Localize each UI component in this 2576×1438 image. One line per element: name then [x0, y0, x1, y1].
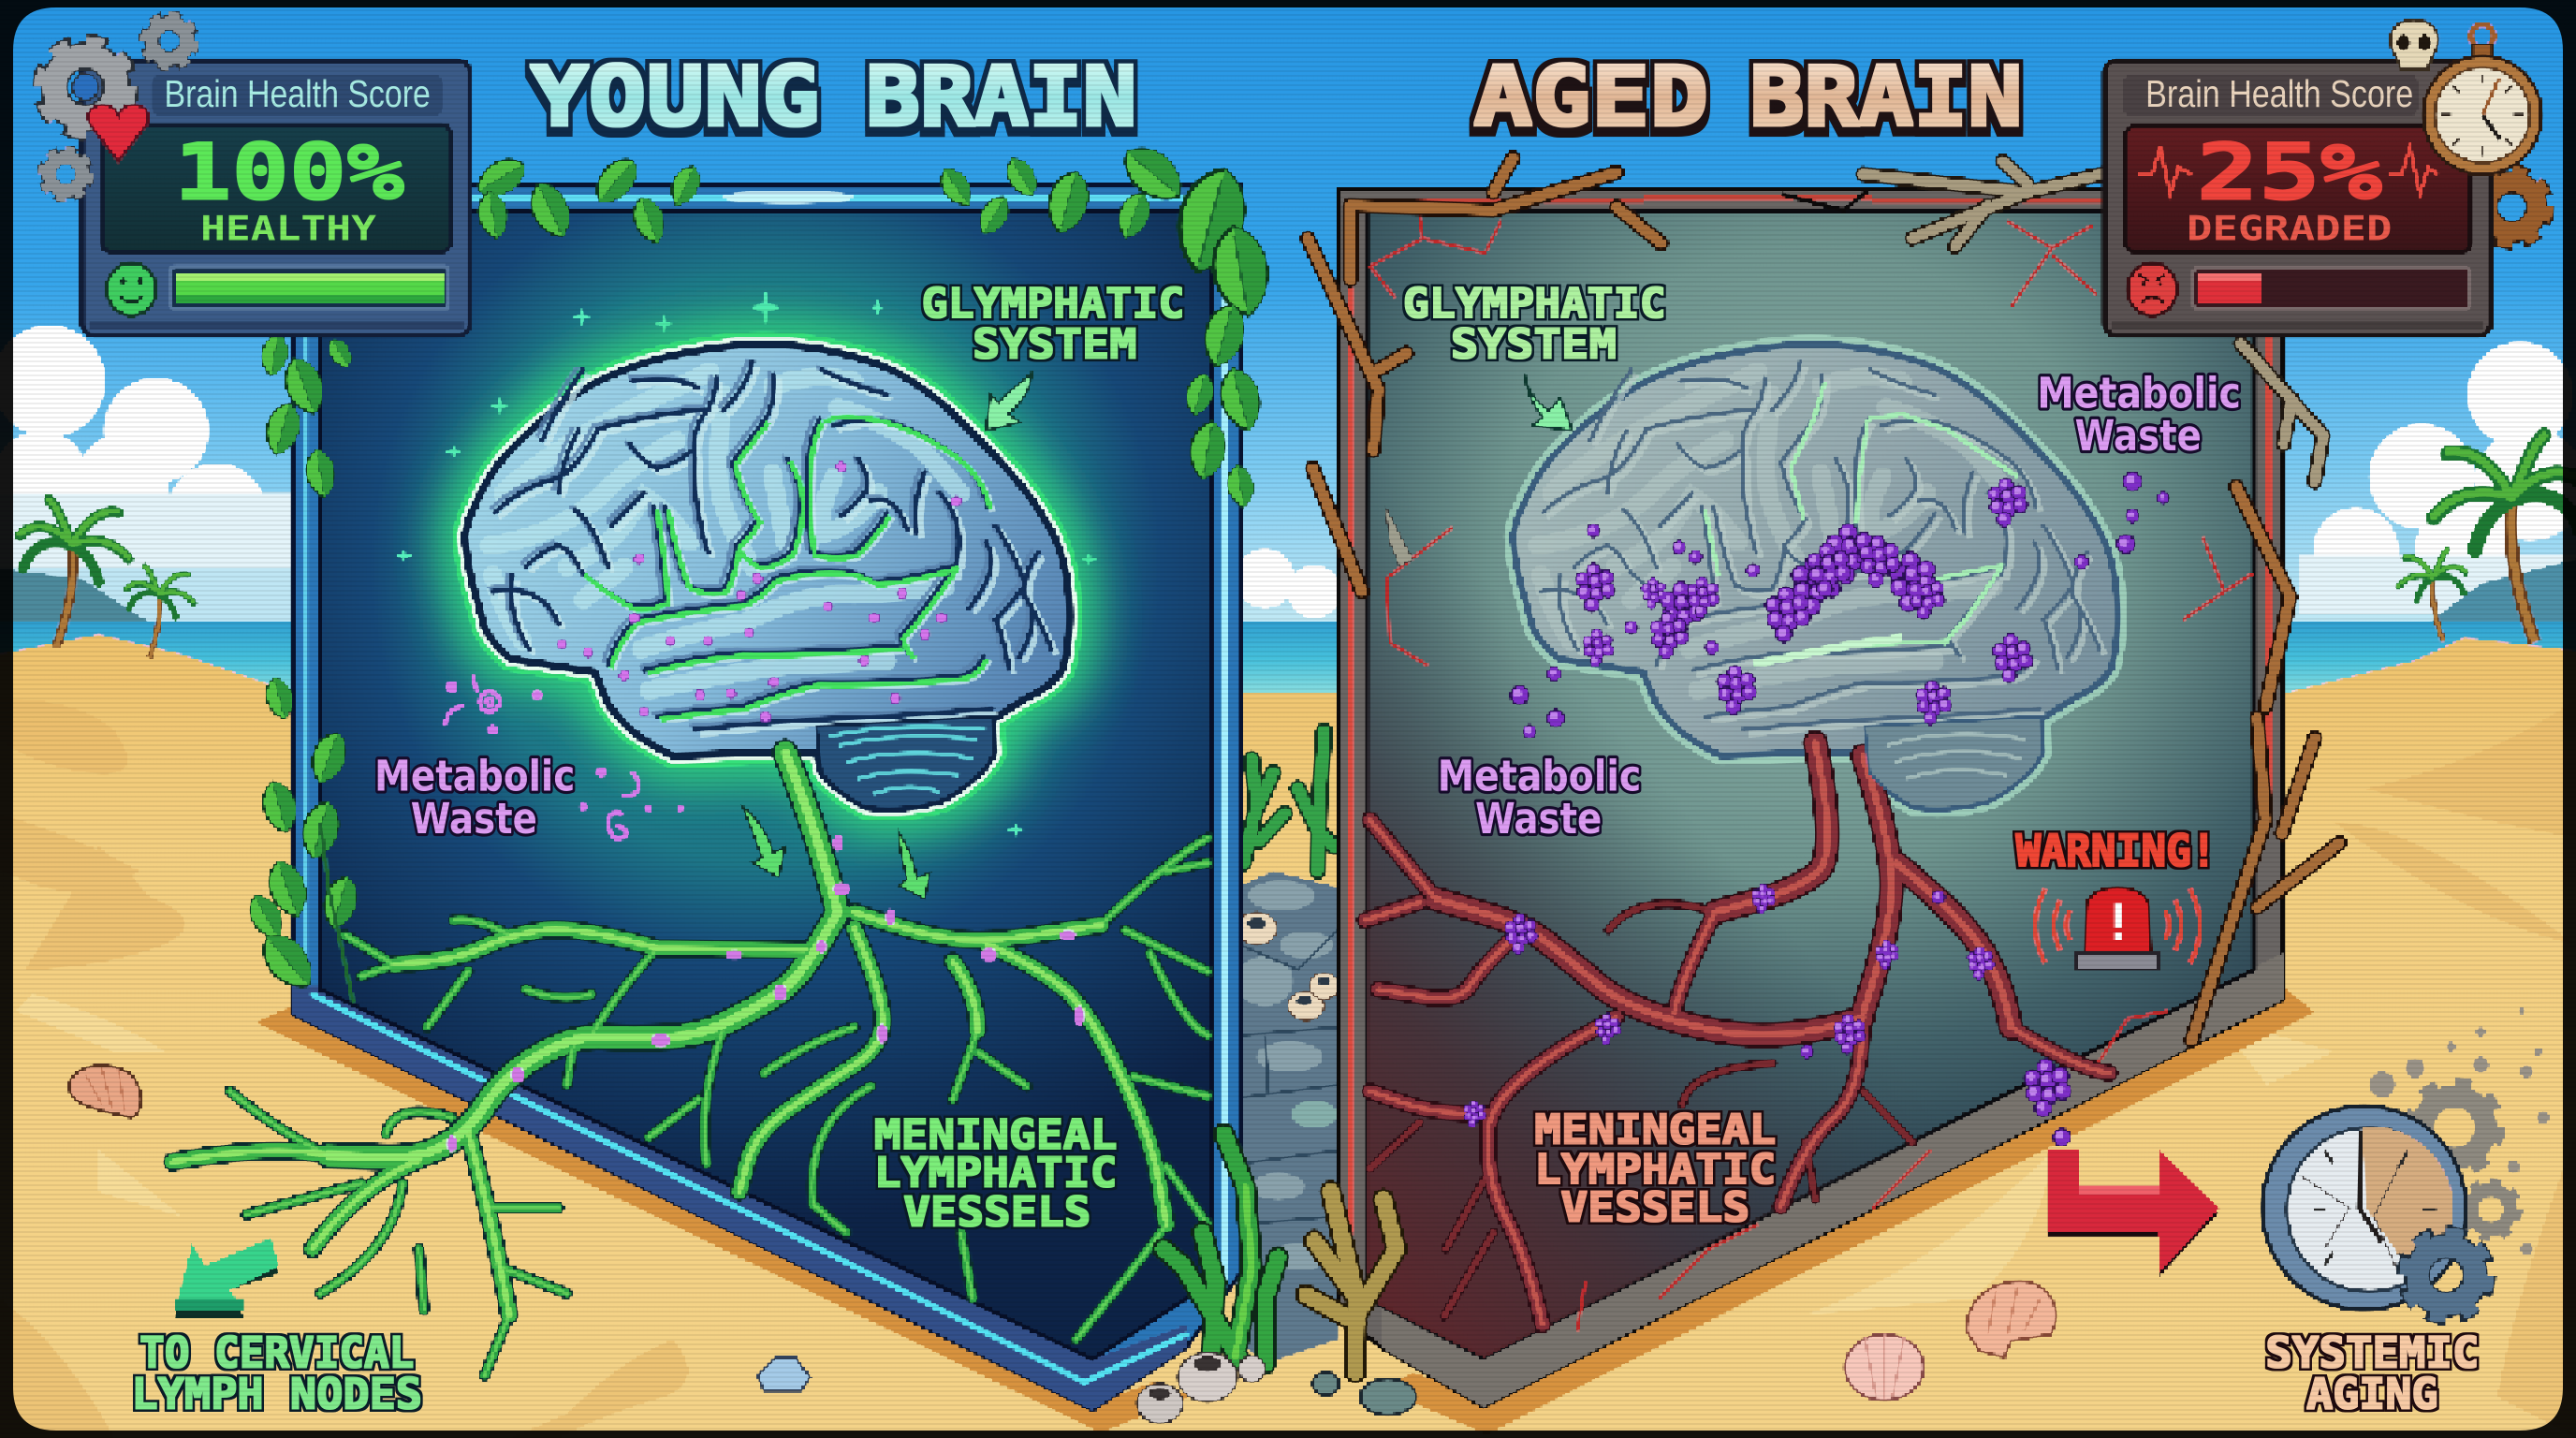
clouds: right: [1236, 342, 2576, 618]
health bar: [2193, 268, 2469, 309]
label: metabolic waste young: Metabolic: [374, 751, 575, 800]
label: meningeal lymphatic vessels aged: MENINGEAL: [1534, 1107, 1776, 1154]
label: to cervical lymph nodes: LYMPH NODES: [131, 1369, 422, 1418]
icon: smiley: [107, 263, 156, 315]
label: glymphatic system aged: GLYMPHATIC: [1403, 280, 1666, 328]
icon: down arrows on young stem: [742, 807, 929, 899]
cracks: [1370, 215, 2252, 1331]
label: glymphatic system young: GLYMPHATIC: [922, 280, 1184, 328]
sand: [0, 635, 2576, 1438]
title: aged brain: [1473, 49, 2023, 144]
icon: blue gear: [2407, 1236, 2486, 1314]
label: metabolic waste aged upper: Metabolic: [2037, 368, 2241, 418]
waste on aged vessels: [1464, 885, 2071, 1146]
label: brain health score young: Brain Health Score: [165, 72, 431, 115]
title: young brain: [531, 49, 1137, 144]
label: warning: WARNING!: [2016, 826, 2217, 877]
brain: aged: [1513, 345, 2117, 808]
cerebellum: [816, 716, 994, 808]
waste specks in brain: [557, 462, 961, 722]
label: metabolic waste aged upper: Waste: [2075, 411, 2202, 461]
icon: green arrow to lymph nodes: [174, 1238, 279, 1318]
label: meningeal lymphatic vessels young: [874, 1111, 1117, 1237]
label: systemic aging: SYSTEMIC: [2265, 1328, 2479, 1377]
barnacles: sand: [1137, 1353, 1265, 1423]
title: young brain: YOUNG: [531, 49, 820, 144]
label: meningeal lymphatic vessels aged: [1534, 1107, 1776, 1231]
sparkles: [396, 291, 1097, 838]
icon: siren: [2036, 888, 2200, 970]
title: aged brain: AGED: [1473, 49, 1708, 144]
label: brain health score aged: Brain Health Score: [2145, 72, 2413, 115]
label: meningeal lymphatic vessels young: MENINGEAL: [874, 1111, 1117, 1159]
pulse lines: [2137, 148, 2438, 194]
label: systemic aging: [2265, 1328, 2479, 1418]
seashell: left: [69, 1065, 141, 1118]
label: metabolic waste young: Waste: [411, 794, 537, 844]
twigs: aged frame: [1308, 158, 2339, 1040]
gear: aged panel: [2478, 173, 2546, 241]
panel: aged brain frame and backdrop: [1339, 189, 2284, 1407]
gyri highlights: [490, 372, 961, 690]
panel: young brain frame and backdrop: [292, 184, 1240, 1410]
vines: young frame: [242, 137, 1274, 1003]
label: metabolic waste aged lower: Metabolic: [1438, 751, 1641, 800]
panel: aged brain health score: [2104, 61, 2491, 335]
label: meningeal lymphatic vessels young: LYMPHATIC: [874, 1149, 1117, 1196]
label: metabolic waste aged lower: Waste: [1475, 794, 1602, 844]
seaweed on rock: [1244, 731, 1334, 871]
rock pillar between panels: [1236, 731, 1339, 1364]
clouds: left: [0, 326, 302, 623]
hills: [0, 559, 2576, 633]
icon: gears and debris: [2369, 1007, 2550, 1255]
sulci: [493, 361, 1051, 729]
palm trees: [20, 435, 2576, 658]
lymphatic vessels: aged: [1365, 742, 2110, 1325]
label: glymphatic system young: SYSTEM: [973, 321, 1137, 369]
waste swirls: young: [446, 677, 683, 839]
health bar: [171, 266, 448, 309]
glymphatic channels: [585, 417, 990, 720]
label: metabolic waste aged lower: [1438, 751, 1641, 844]
brain: young: [465, 345, 1070, 808]
panel ground shadows: [255, 986, 2315, 1434]
stat: 100%: 100%: [174, 127, 404, 217]
label: glymphatic system young: [922, 280, 1184, 369]
waste on vessels: [446, 835, 1084, 1152]
label: glymphatic system aged: [1403, 280, 1666, 369]
icon: red arrow to systemic aging: [2047, 1149, 2219, 1277]
label: glymphatic system aged: SYSTEM: [1451, 321, 1617, 369]
icon: cracked clock: [2262, 1106, 2466, 1310]
seashell: lower right: [1967, 1281, 2056, 1357]
barnacles on rock: [1237, 912, 1339, 1020]
seashell: bottom: [1845, 1334, 1924, 1401]
blue pebble shell: [757, 1357, 810, 1390]
icon: stopwatch: [2423, 24, 2541, 174]
sand patches: [0, 698, 2576, 1438]
title: young brain: BRAIN: [866, 49, 1137, 144]
stat: 25%: 25%: [2197, 127, 2382, 217]
label: meningeal lymphatic vessels aged: LYMPHATIC: [1534, 1146, 1776, 1194]
label: meningeal lymphatic vessels aged: VESSELS: [1560, 1183, 1749, 1231]
gears: young panel: [43, 17, 193, 197]
brain details: aged: [1464, 361, 2170, 1146]
label: degraded: DEGRADED: [2187, 208, 2392, 248]
label: to cervical lymph nodes: [131, 1328, 422, 1418]
icon: angry face: [2128, 263, 2177, 315]
label: systemic aging: AGING: [2306, 1369, 2438, 1418]
label: metabolic waste aged upper: [2037, 368, 2241, 461]
degraded channels: [1705, 381, 2017, 666]
label: to cervical lymph nodes: TO CERVICAL: [139, 1328, 414, 1377]
pebbles: [1312, 1372, 1416, 1415]
icon: green arrow glymphatic young: [986, 373, 1032, 431]
seaweed: gold: [1306, 1192, 1397, 1372]
waste drifting: aged: [1511, 473, 2170, 738]
label: metabolic waste young: [374, 751, 575, 844]
label: healthy: HEALTHY: [200, 208, 377, 248]
waste clusters in aged brain: [1575, 477, 2088, 725]
title: aged brain: BRAIN: [1749, 49, 2023, 144]
icon: skull: [2391, 20, 2438, 69]
lymphatic vessels: young: [172, 753, 1208, 1375]
label: meningeal lymphatic vessels young: VESSELS: [903, 1189, 1090, 1237]
icon: heart: [88, 105, 148, 161]
shard: [1385, 506, 1412, 567]
panel: young brain health score: [82, 61, 470, 335]
icon: green arrow glymphatic aged: [1525, 373, 1573, 431]
seaweed: green: [1164, 1134, 1278, 1364]
